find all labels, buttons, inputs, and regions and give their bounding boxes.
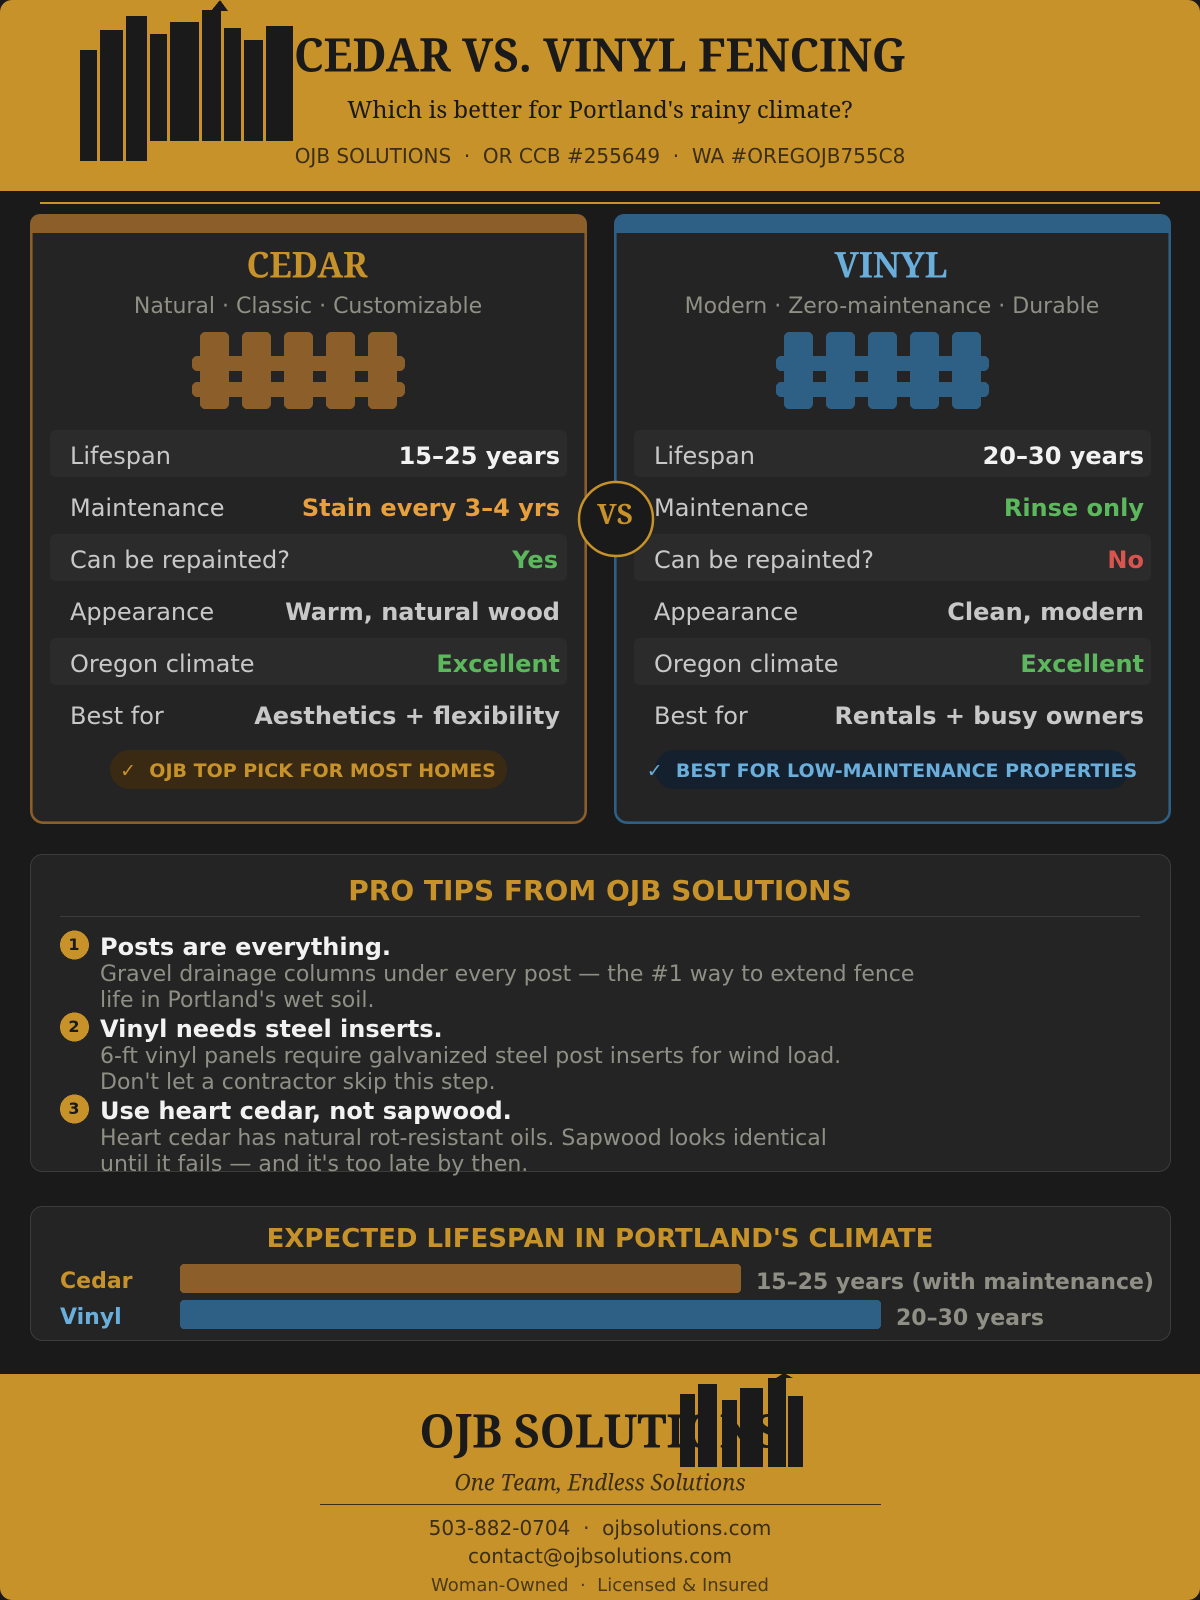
- cedar heading: CEDAR: [246, 242, 369, 288]
- vinyl spec rows: [634, 430, 1151, 730]
- footer band: [0, 1373, 1200, 1600]
- contact email: contact@ojbsolutions.com: [468, 1544, 732, 1568]
- bar: cedar: [60, 1264, 1154, 1295]
- vinyl spec rows: Excellent: [1020, 650, 1144, 678]
- icon: cedar fence: [192, 332, 405, 409]
- cedar spec rows: [50, 430, 567, 730]
- panel: pro tips: [30, 854, 1170, 1177]
- bar: cedar: Cedar: [60, 1269, 133, 1294]
- tip 1: life in Portland's wet soil.: [100, 988, 374, 1013]
- panel: lifespan chart: [30, 1206, 1170, 1340]
- panel: vinyl: [614, 214, 1171, 823]
- vinyl heading: VINYL: [834, 242, 948, 288]
- tip 3: 3: [68, 1099, 80, 1118]
- cedar spec rows: Maintenance: [70, 494, 225, 522]
- vinyl spec rows: Lifespan: [654, 442, 755, 470]
- bar: vinyl: Vinyl: [60, 1305, 122, 1330]
- title: CEDAR VS. VINYL FENCING: [294, 24, 906, 86]
- vinyl tagline: Modern · Zero-maintenance · Durable: [685, 294, 1099, 319]
- vinyl badge: ✓ BEST FOR LOW-MAINTENANCE PROPERTIES: [647, 760, 1137, 782]
- cedar spec rows: 15–25 years: [399, 442, 560, 470]
- vinyl spec rows: 20–30 years: [983, 442, 1144, 470]
- vinyl spec rows: Appearance: [654, 598, 798, 626]
- vinyl spec rows: Rentals + busy owners: [834, 702, 1144, 730]
- footer tagline: One Team, Endless Solutions: [454, 1466, 746, 1498]
- header band: [0, 0, 1200, 191]
- vinyl badge: [647, 750, 1137, 789]
- VS badge: VS: [597, 495, 633, 533]
- vinyl spec rows: Oregon climate: [654, 650, 839, 678]
- chart heading: EXPECTED LIFESPAN IN PORTLAND'S CLIMATE: [267, 1224, 933, 1254]
- tip 2: 2: [68, 1017, 80, 1036]
- cedar tagline: Natural · Classic · Customizable: [134, 294, 482, 319]
- vinyl spec rows: Clean, modern: [947, 598, 1144, 626]
- cedar spec rows: Aesthetics + flexibility: [254, 702, 560, 730]
- cedar spec rows: Excellent: [436, 650, 560, 678]
- credentials: Woman-Owned · Licensed & Insured: [431, 1575, 769, 1596]
- cedar spec rows: Can be repainted?: [70, 546, 290, 574]
- tip 1: Posts are everything.: [100, 933, 391, 961]
- cedar spec rows: Stain every 3–4 yrs: [302, 494, 560, 522]
- icon: OJB skyline logo: [80, 0, 293, 161]
- contact phone and web: 503-882-0704 · ojbsolutions.com: [429, 1516, 771, 1540]
- tip 1: [60, 930, 914, 1013]
- cedar badge: [110, 750, 507, 789]
- tip 2: Vinyl needs steel inserts.: [100, 1015, 443, 1043]
- bar: cedar: 15–25 years (with maintenance): [756, 1270, 1154, 1295]
- tip 2: Don't let a contractor skip this step.: [100, 1070, 496, 1095]
- cedar spec rows: Best for: [70, 702, 164, 730]
- subtitle: Which is better for Portland's rainy climate?: [347, 93, 853, 126]
- vinyl spec rows: Maintenance: [654, 494, 809, 522]
- cedar spec rows: Oregon climate: [70, 650, 255, 678]
- vinyl spec rows: Can be repainted?: [654, 546, 874, 574]
- tip 1: Gravel drainage columns under every post — the #1 way to extend fence: [100, 962, 914, 987]
- cedar spec rows: Lifespan: [70, 442, 171, 470]
- footer company name: OJB SOLUTIONS: [420, 1400, 780, 1462]
- bar: vinyl: [60, 1300, 1044, 1331]
- tip 3: [60, 1094, 827, 1177]
- cedar spec rows: Warm, natural wood: [285, 598, 560, 626]
- icon: footer skyline logo: [680, 1373, 803, 1467]
- VS badge: [579, 482, 653, 556]
- tip 3: until it fails — and it's too late by then.: [100, 1152, 528, 1177]
- tip 2: [60, 1012, 841, 1095]
- panel: cedar: [30, 214, 587, 823]
- cedar spec rows: Yes: [511, 546, 558, 574]
- pro tips heading: PRO TIPS FROM OJB SOLUTIONS: [348, 874, 852, 907]
- tip 3: Use heart cedar, not sapwood.: [100, 1097, 512, 1125]
- cedar badge: ✓ OJB TOP PICK FOR MOST HOMES: [120, 760, 496, 782]
- vinyl spec rows: Best for: [654, 702, 748, 730]
- bar: vinyl: 20–30 years: [896, 1306, 1044, 1331]
- vinyl spec rows: Rinse only: [1004, 494, 1144, 522]
- vinyl spec rows: No: [1107, 546, 1144, 574]
- tip 3: Heart cedar has natural rot-resistant oils. Sapwood looks identical: [100, 1126, 827, 1151]
- cedar spec rows: Appearance: [70, 598, 214, 626]
- icon: vinyl fence: [776, 332, 989, 409]
- tip 2: 6-ft vinyl panels require galvanized steel post inserts for wind load.: [100, 1044, 841, 1069]
- company and license line: OJB SOLUTIONS · OR CCB #255649 · WA #OREGOJB755C8: [295, 144, 905, 168]
- tip 1: 1: [68, 935, 80, 954]
